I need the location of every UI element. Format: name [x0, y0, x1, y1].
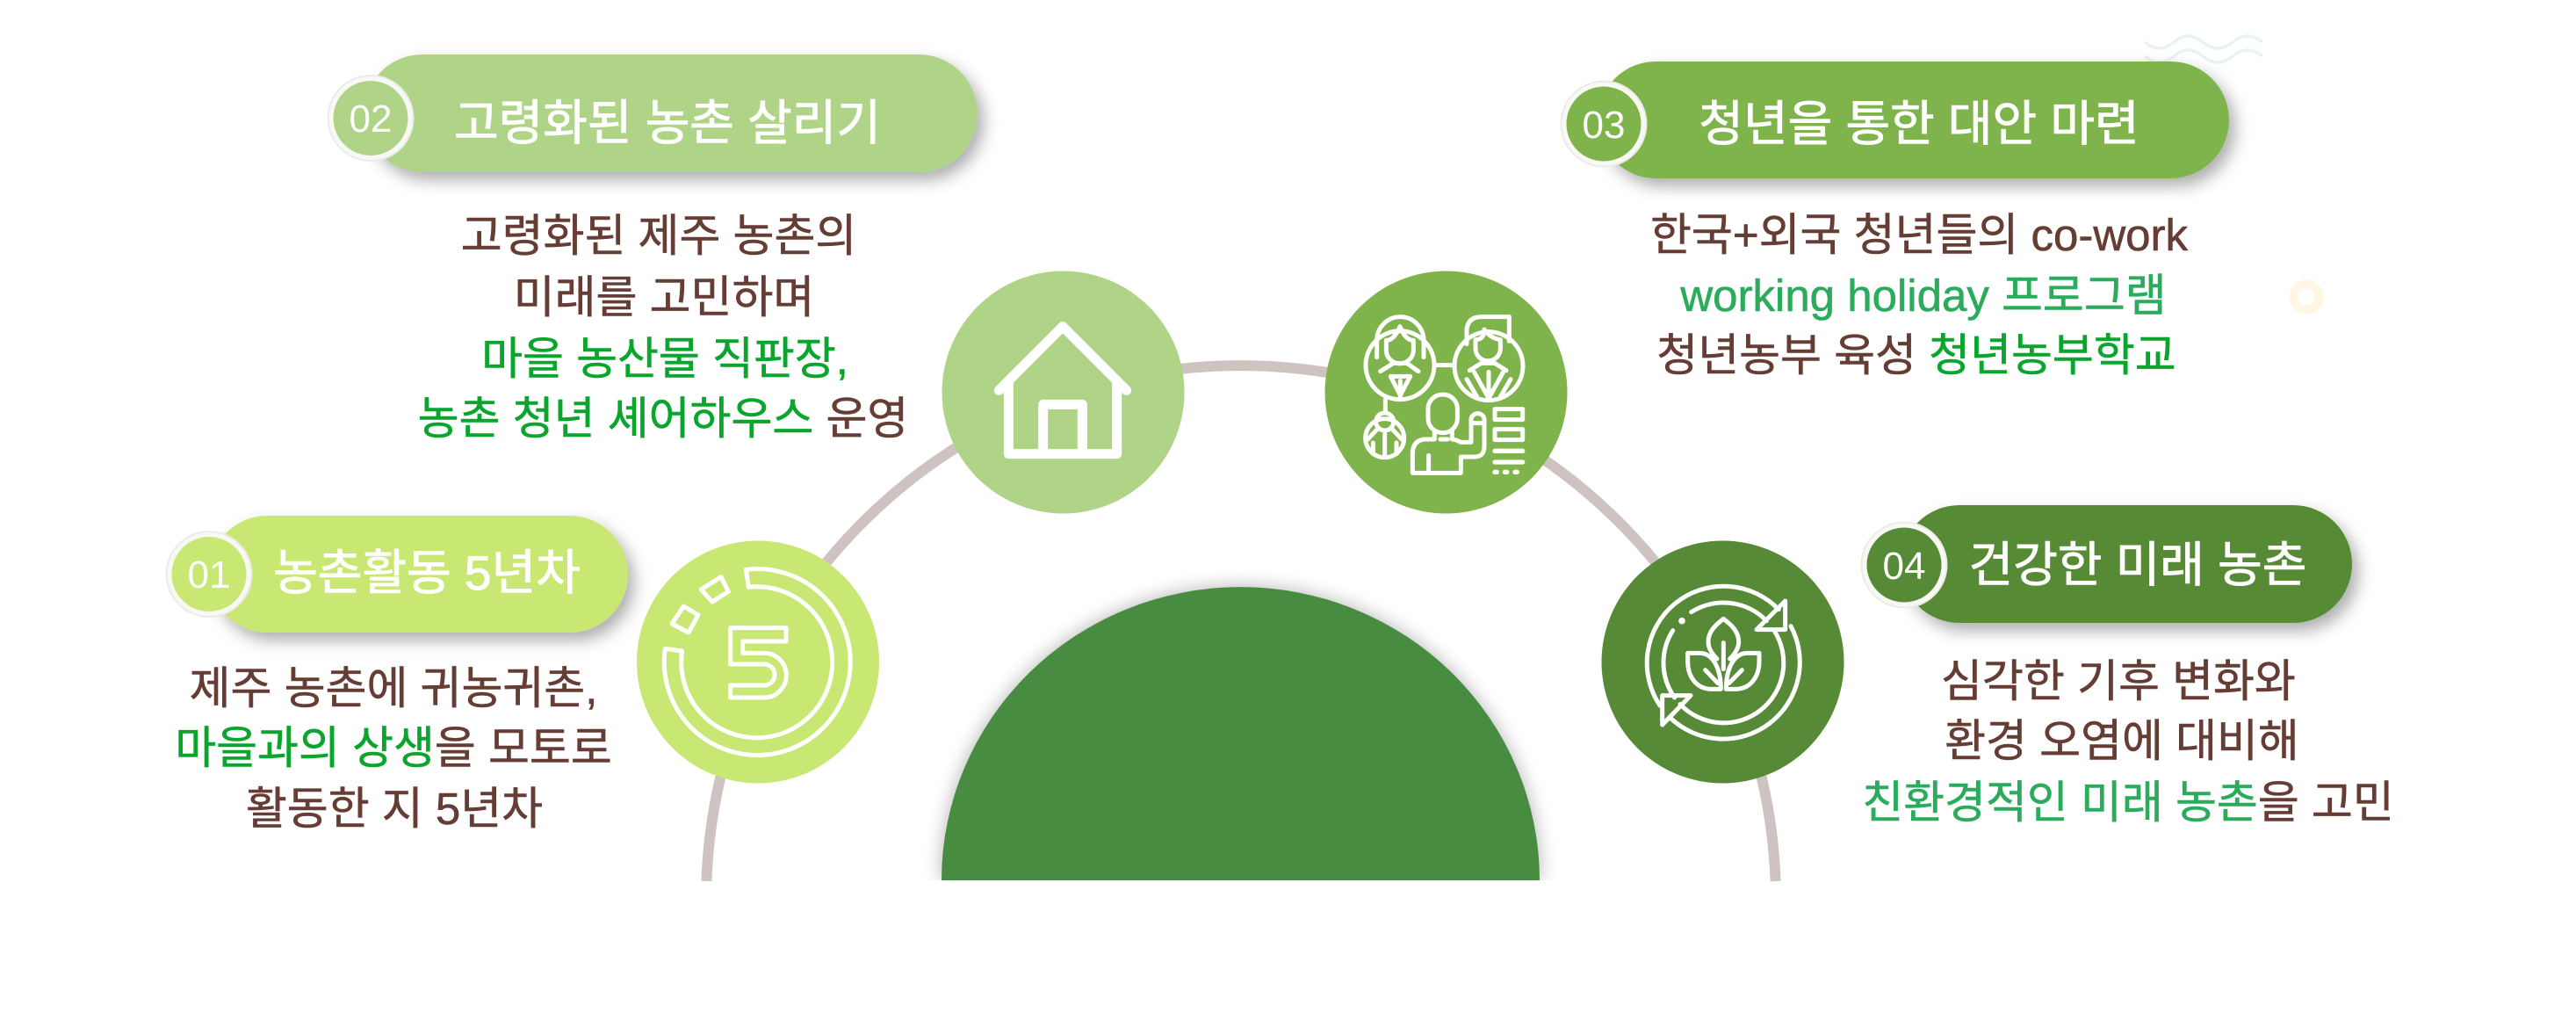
- decoration: ring: [2294, 285, 2319, 309]
- panel: step 02: [328, 54, 978, 444]
- title 03: 청년을 통한 대안 마련: [1699, 97, 2139, 151]
- pill 04: [1901, 505, 2352, 623]
- body text 01: 활동한 지 5년차: [246, 784, 543, 834]
- body text 01: [175, 663, 612, 834]
- infographic canvas: [165, 34, 2390, 882]
- badge 03: [1562, 81, 1646, 167]
- body text 03: working holiday 프로그램: [1679, 271, 2167, 321]
- body text 01: 제주 농촌에 귀농귀촌,: [190, 663, 597, 713]
- badge 03: 03: [1583, 104, 1625, 147]
- body text 03: 한국+외국 청년들의 co-work: [1650, 210, 2189, 260]
- body text 04: 친환경적인 미래 농촌을 고민: [1862, 778, 2394, 828]
- body text 03: 청년농부 육성 청년농부학교: [1656, 330, 2176, 380]
- body text 02: 고령화된 제주 농촌의: [461, 211, 856, 261]
- body text 04: 환경 오염에 대비해: [1945, 716, 2299, 766]
- connecting arc: [706, 365, 1776, 881]
- decoration: wavy lines: [2145, 36, 2262, 62]
- title 01: 농촌활동 5년차: [273, 546, 581, 600]
- badge 04: 04: [1883, 545, 1925, 588]
- body text 02: 미래를 고민하며: [514, 272, 814, 322]
- badge 02: [328, 76, 413, 161]
- central green semicircle: [942, 587, 1540, 880]
- icon circle 01: five years: [637, 541, 879, 784]
- body text 02: 마을 농산물 직판장,: [481, 334, 848, 384]
- badge 01: [167, 532, 251, 617]
- body text 02: 농촌 청년 셰어하우스 운영: [418, 394, 908, 444]
- icon circle 04: eco cycle: [1602, 541, 1844, 784]
- panel: step 04: [1862, 505, 2394, 828]
- badge 01: 01: [188, 553, 230, 597]
- panel: step 03: [1562, 61, 2229, 380]
- body text 02: [418, 211, 908, 444]
- panel: step 01: [167, 516, 628, 834]
- pill 03: [1598, 61, 2229, 178]
- badge 02: 02: [350, 98, 392, 141]
- body text 03: [1650, 210, 2189, 380]
- pill 02: [364, 54, 978, 172]
- title 04: 건강한 미래 농촌: [1969, 538, 2306, 592]
- body text 04: 심각한 기후 변화와: [1941, 656, 2296, 706]
- icon circle 03: young people network: [1324, 271, 1567, 513]
- title 02: 고령화된 농촌 살리기: [454, 96, 881, 150]
- badge 04: [1862, 522, 1946, 608]
- body text 01: 마을과의 상생을 모토로: [175, 723, 612, 773]
- pill 01: [209, 516, 628, 633]
- body text 04: [1862, 656, 2394, 828]
- icon circle 02: house: [942, 271, 1184, 513]
